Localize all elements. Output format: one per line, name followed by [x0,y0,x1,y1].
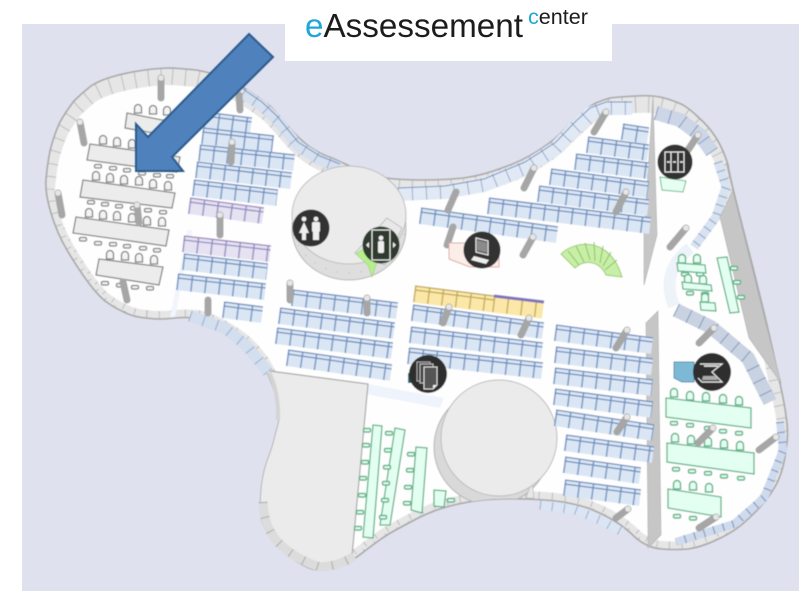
room: lower left block [258,370,369,572]
meeting tables: green, bottom centre [354,425,454,538]
meeting tables: grey, left lobe [73,104,180,290]
room: lower round core [434,380,557,505]
desk block: lower left [177,254,268,315]
meeting tables: green, right lobe [666,388,754,520]
desk block: centre left [276,290,398,373]
floor and outer wall [46,68,788,578]
desk block: upper left [193,112,295,198]
desk rows: purple highlighted [183,198,271,254]
icon: restrooms [292,210,330,246]
green desk below lockers [660,177,686,192]
title box [285,0,612,61]
title superscript: center [528,5,588,29]
desk block: upper right [420,124,651,235]
icon: computer [464,232,500,268]
icon: lockers [658,144,692,180]
title: eAssessement center: eAssessement [305,7,523,44]
icon: copier [409,355,447,393]
icon: scanner [693,353,731,391]
meeting tables: green, upper right [677,254,744,313]
room: upper round core [292,166,406,280]
arrow: pointing to meeting area [136,34,273,171]
desk block: lower right [554,325,654,498]
red desk beside computer [449,243,499,267]
green fan seating [561,242,622,277]
equipment beside copier [408,373,434,383]
equipment beside scanner [674,362,694,382]
desk block: centre [408,305,544,371]
pillars [55,75,779,528]
icon: elevator [362,226,400,264]
perimeter window bands [190,89,783,542]
desk row: yellow highlighted [414,286,544,310]
partition walls [644,97,781,548]
